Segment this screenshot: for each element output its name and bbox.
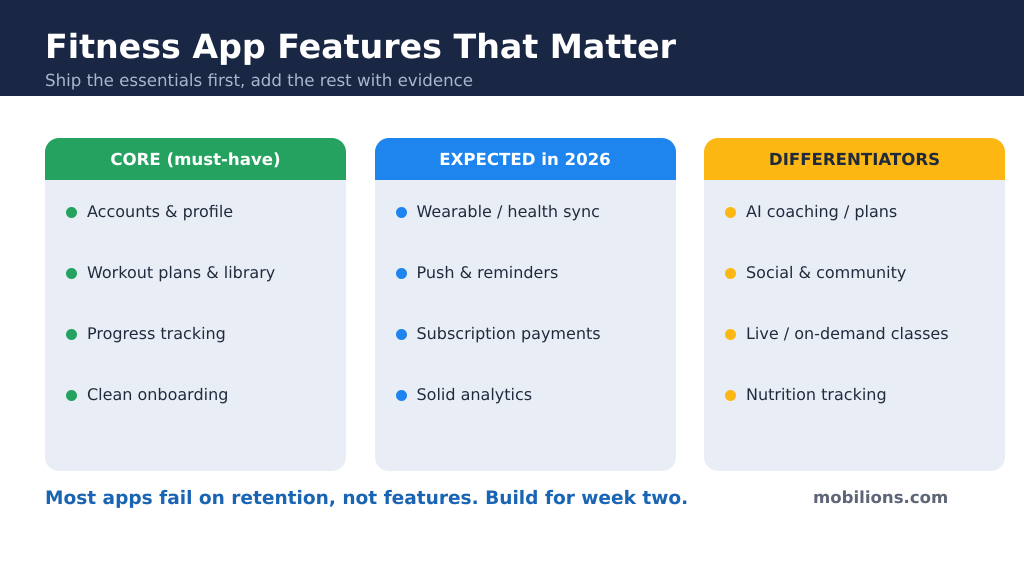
item: wearable: Wearable / health sync (416, 202, 600, 221)
takeaway callout: Most apps fail on retention, not features. Build for week two. (45, 488, 688, 509)
item: ai coaching: AI coaching / plans (746, 202, 897, 221)
item: subscription: Subscription payments (416, 324, 601, 343)
heading: core: CORE (must-have) (110, 150, 281, 168)
header band (0, 0, 1024, 96)
heading: differentiators (704, 138, 1005, 180)
item: push: Push & reminders (416, 263, 558, 282)
item: progress: Progress tracking (87, 324, 226, 343)
item: onboarding: Clean onboarding (87, 385, 228, 404)
item: nutrition: Nutrition tracking (746, 385, 887, 404)
item: accounts: Accounts & profile (87, 202, 233, 221)
item: analytics: Solid analytics (416, 385, 532, 404)
item: social: Social & community (746, 263, 906, 282)
subtitle: Ship the essentials first, add the rest with evidence (45, 71, 473, 90)
heading: core (45, 138, 346, 180)
brand: mobilions.com (813, 488, 948, 507)
heading: expected: EXPECTED in 2026 (439, 150, 611, 168)
item: classes: Live / on-demand classes (746, 324, 949, 343)
panel: expected (374, 138, 676, 470)
heading: differentiators: DIFFERENTIATORS (769, 150, 940, 168)
panel: differentiators (704, 138, 1005, 470)
item: workout plans: Workout plans & library (87, 263, 275, 282)
panel: core (45, 138, 346, 470)
title: Fitness App Features That Matter (45, 27, 676, 66)
heading: expected (374, 138, 676, 180)
